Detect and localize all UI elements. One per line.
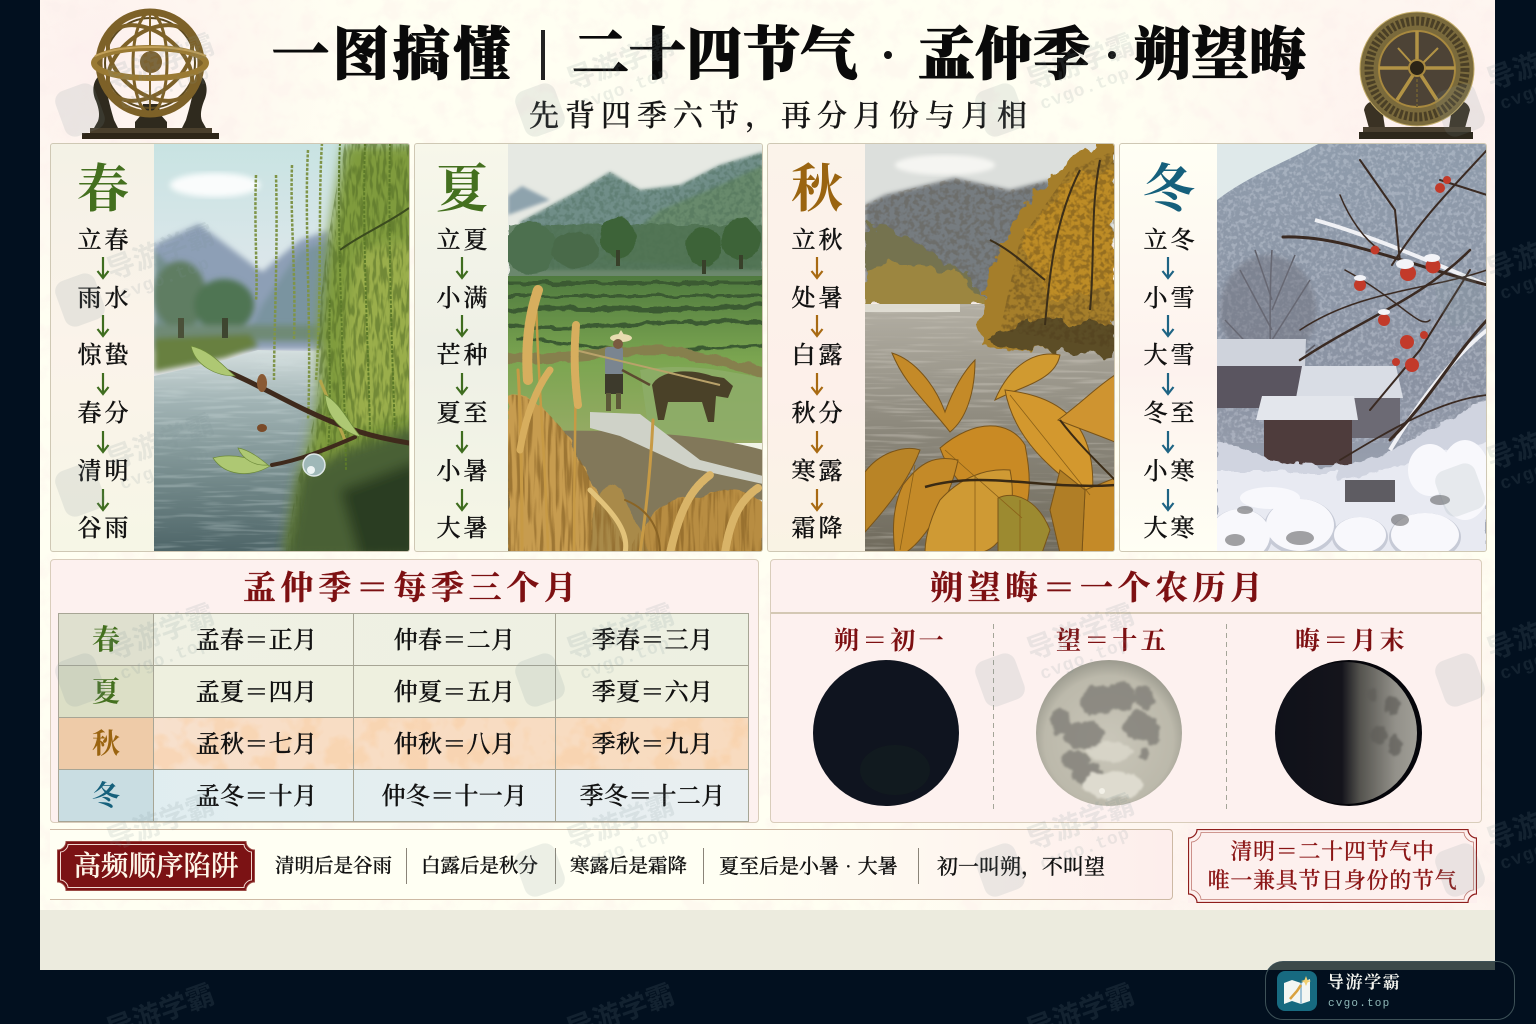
summer text column: 大暑 (436, 516, 490, 542)
heading: shuo wang hui: 朔望晦＝一个农历月 (930, 571, 1268, 607)
watermarks: cvgo.top (1038, 64, 1133, 115)
watermarks: 导游学霸 (1023, 788, 1138, 856)
watermarks: cvgo.top (578, 64, 673, 115)
label: spring: 春 (92, 625, 120, 656)
season character: summer: 夏 (436, 162, 488, 219)
watermarks: cvgo.top (1038, 824, 1133, 875)
watermarks: 导游学霸 (103, 788, 218, 856)
row background: summer (58, 665, 749, 717)
photo: winter temple and persimmon branch (1217, 144, 1486, 551)
table: months by season (58, 613, 749, 822)
moon: waning crescent (1275, 660, 1422, 806)
summer text column (436, 162, 490, 542)
label: summer (58, 665, 154, 717)
heading: meng zhong ji: 孟仲季＝每季三个月 (243, 571, 581, 607)
spring text column: 春分 (78, 401, 132, 427)
table: months by season: 仲夏＝五月 (394, 680, 515, 706)
autumn text column (791, 162, 846, 542)
panel: summer (414, 143, 763, 552)
trap: xiazhi: 夏至后是小暑 · 大暑 (719, 856, 898, 878)
watermarks: 导游学霸 (563, 788, 678, 856)
watermarks: cvgo.top (118, 64, 213, 115)
watermarks: 导游学霸 (563, 28, 678, 96)
table: months by season: 孟秋＝七月 (196, 732, 317, 758)
winter text column: 立冬 (1144, 228, 1198, 254)
season character: spring: 春 (77, 162, 129, 219)
label: full moon: 望＝十五 (1056, 628, 1169, 655)
header divider (771, 612, 1481, 614)
spring text column: 谷雨 (78, 516, 132, 542)
title: 朔望晦 (1134, 24, 1306, 87)
moon: new moon (813, 660, 959, 806)
autumn text column: 寒露 (792, 459, 846, 485)
callout frame (1188, 829, 1477, 903)
brand badge (1265, 961, 1515, 1020)
ox (652, 371, 733, 422)
watermarks: cvgo.top (578, 824, 673, 875)
watermarks: cvgo.top (578, 634, 673, 685)
panel: shuo-wang-hui (770, 559, 1482, 823)
panel: spring (50, 143, 410, 552)
watermarks: cvgo.top (118, 254, 213, 305)
spring text column (77, 162, 132, 542)
column dividers (993, 624, 1227, 809)
winter text column: 冬至 (1144, 401, 1198, 427)
spring text column: 雨水 (78, 286, 132, 312)
watermarks: 导游学霸 (563, 598, 678, 666)
autumn row mottling (154, 718, 748, 769)
badge plate (57, 841, 255, 891)
spring text column: 立春 (78, 228, 132, 254)
label: winter (58, 769, 154, 822)
season character: autumn: 秋 (791, 162, 843, 219)
trap: qingming: 清明后是谷雨 (275, 856, 392, 877)
panel: autumn (767, 143, 1115, 552)
watermarks: 导游学霸 (103, 408, 218, 476)
panel: winter (1119, 143, 1487, 552)
table: months by season: 季冬＝十二月 (580, 784, 725, 810)
title: 二十四节气 (572, 24, 857, 87)
panel: meng-zhong-ji table (50, 559, 759, 823)
watermarks: 导游学霸 (103, 28, 218, 96)
watermarks: cvgo.top (118, 444, 213, 495)
title: 孟仲季 (918, 24, 1090, 87)
brand name: 导游学霸 (1327, 973, 1401, 992)
farmer (605, 330, 650, 411)
table: months by season: 孟春＝正月 (196, 628, 317, 654)
winter text column: 小寒 (1144, 459, 1198, 485)
table: months by season: 仲春＝二月 (394, 628, 515, 654)
table: months by season: 季春＝三月 (592, 628, 713, 654)
label: new moon: 朔＝初一 (834, 628, 947, 655)
autumn text column: 霜降 (792, 516, 846, 542)
title: 一图搞懂 (272, 24, 514, 87)
spring text column: 惊蛰 (78, 343, 132, 369)
autumn text column: 秋分 (792, 401, 846, 427)
autumn text column: 立秋 (792, 228, 846, 254)
badge: frequent order traps (57, 841, 255, 891)
watermarks: 导游学霸 (1023, 28, 1138, 96)
trap: chuyi: 初一叫朔，不叫望 (937, 855, 1105, 879)
label: last day moon: 晦＝月末 (1295, 628, 1408, 655)
season character: winter: 冬 (1143, 162, 1195, 219)
subtitle: 先背四季六节，再分月份与月相 (529, 100, 1033, 133)
trap: hanlu: 寒露后是霜降 (570, 856, 687, 877)
summer text column: 立夏 (436, 228, 490, 254)
row background: spring (58, 613, 749, 665)
photo: spring river and willow (154, 144, 409, 551)
icon: armillary sphere (82, 8, 219, 139)
summer text column: 芒种 (436, 343, 490, 369)
summer text column: 小暑 (436, 459, 490, 485)
winter text column: 大雪 (1144, 343, 1198, 369)
autumn text column: 处暑 (792, 286, 846, 312)
callout text: 唯一兼具节日身份的节气 (1208, 868, 1457, 893)
watermarks: 导游学霸 (1023, 598, 1138, 666)
trap: bailu: 白露后是秋分 (421, 856, 538, 877)
watermarks: cvgo.top (1038, 634, 1133, 685)
row background: winter (58, 769, 749, 822)
label: summer: 夏 (92, 677, 120, 708)
winter text column: 小雪 (1144, 286, 1198, 312)
summer text column: 小满 (436, 286, 490, 312)
label: winter: 冬 (92, 781, 120, 812)
table: months by season: 孟冬＝十月 (196, 784, 317, 810)
table: months by season: 孟夏＝四月 (196, 680, 317, 706)
moon: full moon (1036, 660, 1182, 806)
callout text: 清明＝二十四节气中 (1230, 839, 1435, 864)
title dot (884, 51, 892, 59)
callout: qingming (1188, 829, 1477, 903)
brand url: cvgo.top (1328, 998, 1390, 1010)
callout text (1208, 839, 1457, 893)
table: months by season: 仲冬＝十一月 (382, 784, 527, 810)
winter text column (1143, 162, 1198, 542)
row background: autumn (58, 717, 749, 769)
badge text: 高频顺序陷阱 (74, 850, 238, 881)
label: autumn (58, 717, 154, 769)
winter text column: 大寒 (1144, 516, 1198, 542)
photo: summer terraces, farmer and wheat (508, 144, 762, 551)
title dot (1108, 51, 1116, 59)
watermarks: cvgo.top (118, 634, 213, 685)
watermarks: 导游学霸 (103, 598, 218, 666)
table: months by season: 仲秋＝八月 (394, 732, 515, 758)
watermarks: 导游学霸 (103, 218, 218, 286)
label: autumn: 秋 (92, 729, 120, 760)
table: months by season: 季夏＝六月 (592, 680, 713, 706)
summer text column: 夏至 (436, 401, 490, 427)
table: months by season: 季秋＝九月 (592, 732, 713, 758)
panel: frequent order traps (50, 829, 1173, 900)
brand strip over sheet (1266, 962, 1495, 970)
brand icon: map (1277, 971, 1317, 1011)
autumn text column: 白露 (792, 343, 846, 369)
spring text column: 清明 (78, 459, 132, 485)
table grid (58, 613, 749, 822)
icon: bronze dial (1359, 12, 1474, 139)
photo: autumn lake and golden leaves (865, 144, 1114, 551)
title (272, 24, 1306, 87)
label: spring (58, 613, 154, 665)
